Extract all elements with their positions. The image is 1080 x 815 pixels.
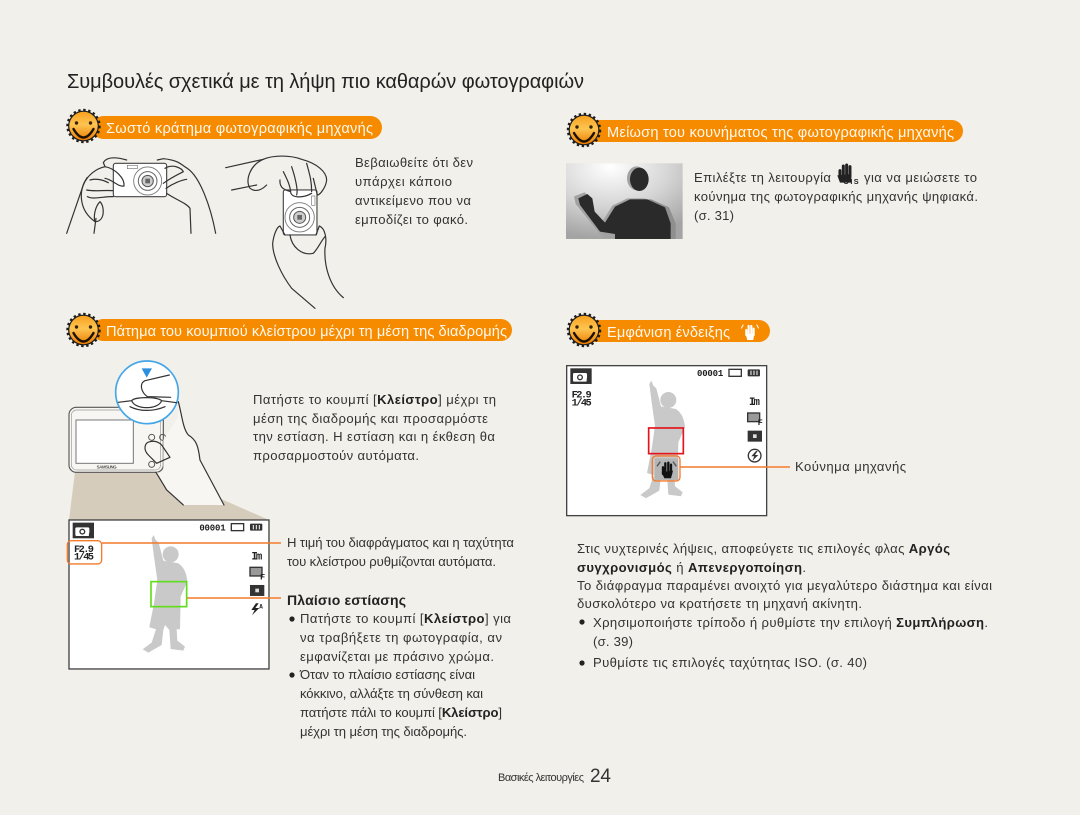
- text: night shooting tips: (σ. 39): [593, 634, 633, 649]
- text: half-press instructions: μέση της διαδρομής και προσαρμόστε: [253, 411, 488, 426]
- icon: magnifier circle with finger on shutter: [116, 361, 178, 424]
- icon: smiling sun: [568, 114, 600, 146]
- icon: smiling sun: [68, 314, 100, 346]
- section heading: reduce camera shake: Μείωση του κουνήματος της φωτογραφικής μηχανής: [607, 125, 954, 141]
- section heading: correct camera grip: Σωστό κράτημα φωτογραφικής μηχανής: [106, 121, 373, 137]
- icon: OIS hand: [837, 165, 859, 186]
- text: focus frame notes: κόκκινο, αλλάξτε τη σύνθεση και: [300, 686, 483, 701]
- icon: quality: [748, 413, 763, 428]
- text: focus frame notes: Πλαίσιο εστίασης: [287, 592, 406, 608]
- icon: metering: [250, 585, 264, 596]
- camera screen: shake warning display: Im: [749, 397, 760, 409]
- text: half-press instructions: την εστίαση. Η εστίαση και η έκθεση θα: [253, 429, 495, 444]
- section heading: half-press shutter: [68, 314, 512, 346]
- focus frame: green: [151, 582, 187, 607]
- text: check lens not obstructed: εμποδίζει το φακό.: [355, 212, 468, 227]
- text: focus frame notes: Πατήστε το κουμπί [Κλείστρο] για: [300, 611, 511, 626]
- text: check lens not obstructed: Βεβαιωθείτε ότι δεν: [355, 155, 473, 170]
- camera screen: focus display: F2.9: [74, 544, 94, 556]
- text: focus frame notes: μέχρι τη μέση της διαδρομής.: [300, 724, 467, 739]
- text: aperture note: του κλείστρου ρυθμίζονται αυτόματα.: [287, 554, 496, 569]
- icon: quality: F: [260, 572, 265, 582]
- text: focus frame notes: να τραβήξετε τη φωτογραφία, αν: [300, 630, 502, 645]
- icon: battery: [748, 369, 760, 376]
- illustration: hands holding camera vertically: [226, 156, 343, 308]
- silhouette: boy pointing up: [143, 535, 187, 653]
- icon: memory card: [729, 369, 741, 376]
- text: select OIS mode: [694, 170, 978, 223]
- text: night shooting tips: Ρυθμίστε τις επιλογές ταχύτητας ISO. (σ. 40): [593, 655, 867, 670]
- leader line: aperture value: [102, 542, 281, 544]
- camera screen: shake warning display: F2.9: [572, 390, 592, 402]
- icon: flash off: [748, 449, 761, 462]
- icon: camera mode: P: [586, 378, 590, 384]
- callout: shake warning: [652, 456, 680, 481]
- icon: flash auto: [251, 603, 263, 615]
- icon: smiling sun: [568, 314, 600, 346]
- footer: page number: 24: [590, 766, 611, 787]
- section heading: correct camera grip: [68, 110, 382, 142]
- icon: battery: [250, 524, 262, 531]
- camera screen: focus display: Im: [251, 551, 262, 563]
- section heading: reduce camera shake: [568, 114, 963, 146]
- text: half-press instructions: [253, 392, 496, 463]
- text: night shooting tips: Χρησιμοποιήστε τρίποδο ή ρυθμίστε την επιλογή Συμπλήρωση.: [593, 615, 988, 630]
- icon: camera mode: [570, 368, 592, 384]
- camera screen: focus display: 00001: [199, 523, 226, 533]
- icon: flash auto: A: [259, 604, 263, 611]
- icon: smiling sun: [68, 110, 100, 142]
- icon: OIS hand: OIS: [843, 177, 859, 186]
- label: camera shake: Κούνημα μηχανής: [795, 459, 906, 474]
- text: select OIS mode: Επιλέξτε τη λειτουργία: [694, 170, 831, 185]
- text: select OIS mode: για να μειώσετε το: [864, 170, 977, 185]
- text: aperture note: [287, 535, 514, 569]
- camera screen: focus display: [67, 520, 269, 669]
- section heading: shake indicator: Εμφάνιση ένδειξης: [607, 325, 730, 341]
- illustration: half pressing shutter on camera back with magnifier: [69, 361, 269, 520]
- focus frame: red: [649, 428, 683, 454]
- photo: shaken silhouette of man: [566, 163, 683, 239]
- icon: memory card: [231, 524, 244, 531]
- text: half-press instructions: προσαρμοστούν αυτόματα.: [253, 448, 419, 463]
- text: aperture note: Η τιμή του διαφράγματος και η ταχύτητα: [287, 535, 514, 550]
- icon: shake warning hand: [655, 458, 678, 480]
- icon: quality: F: [758, 418, 763, 428]
- text: night shooting tips: συγχρονισμός ή Απενεργοποίηση.: [577, 560, 806, 575]
- text: focus frame notes: [287, 592, 511, 739]
- text: check lens not obstructed: αντικείμενο που να: [355, 193, 471, 208]
- text: focus frame notes: Όταν το πλαίσιο εστίασης είναι: [299, 667, 475, 682]
- icon: camera mode: [73, 523, 94, 538]
- leader line: focus frame: [187, 597, 281, 599]
- text: check lens not obstructed: υπάρχει κάποιο: [355, 174, 452, 189]
- leader line: shake warning: [680, 466, 790, 468]
- illustration: half pressing shutter on camera back with magnifier: SAMSUNG: [97, 464, 117, 469]
- camera screen: shake warning display: 00001: [697, 369, 724, 379]
- title: Συμβουλές σχετικά με τη λήψη πιο καθαρών φωτογραφιών: [67, 71, 584, 93]
- camera screen: shake warning display: 1/45: [572, 397, 592, 409]
- footer: page number: [498, 766, 611, 787]
- text: select OIS mode: (σ. 31): [694, 208, 734, 223]
- icon: camera mode: P: [89, 532, 93, 538]
- section heading: half-press shutter: Πάτημα του κουμπιού κλείστρου μέχρι τη μέση της διαδρομής: [106, 324, 507, 340]
- text: night shooting tips: Στις νυχτερινές λήψεις, αποφεύγετε τις επιλογές φλας Αργός: [577, 541, 950, 556]
- camera screen: focus display: 1/45: [74, 552, 94, 564]
- footer: page number: Βασικές λειτουργίες: [498, 772, 584, 784]
- text: night shooting tips: δυσκολότερο να κρατήσετε τη μηχανή ακίνητη.: [577, 596, 862, 611]
- icon: quality: [250, 567, 265, 582]
- text: check lens not obstructed: [355, 155, 473, 227]
- icon: white shaking hand: [741, 325, 759, 340]
- text: half-press instructions: Πατήστε το κουμπί [Κλείστρο] μέχρι τη: [253, 392, 496, 407]
- text: night shooting tips: Το διάφραγμα παραμένει ανοιχτό για μεγαλύτερο διάστημα και είναι: [577, 578, 992, 593]
- text: focus frame notes: εμφανίζεται με πράσινο χρώμα.: [300, 649, 494, 664]
- section heading: shake indicator: [568, 314, 770, 346]
- silhouette: boy pointing up: [640, 381, 685, 498]
- callout: aperture and shutter value: [67, 541, 102, 564]
- text: select OIS mode: κούνημα της φωτογραφικής μηχανής ψηφιακά.: [694, 189, 978, 204]
- illustration: two hands holding camera horizontally: [67, 158, 216, 233]
- text: focus frame notes: πατήστε πάλι το κουμπί [Κλείστρο]: [300, 705, 502, 720]
- camera screen: shake warning display: [567, 366, 767, 516]
- text: night shooting tips: [577, 541, 992, 670]
- icon: metering: [748, 431, 762, 442]
